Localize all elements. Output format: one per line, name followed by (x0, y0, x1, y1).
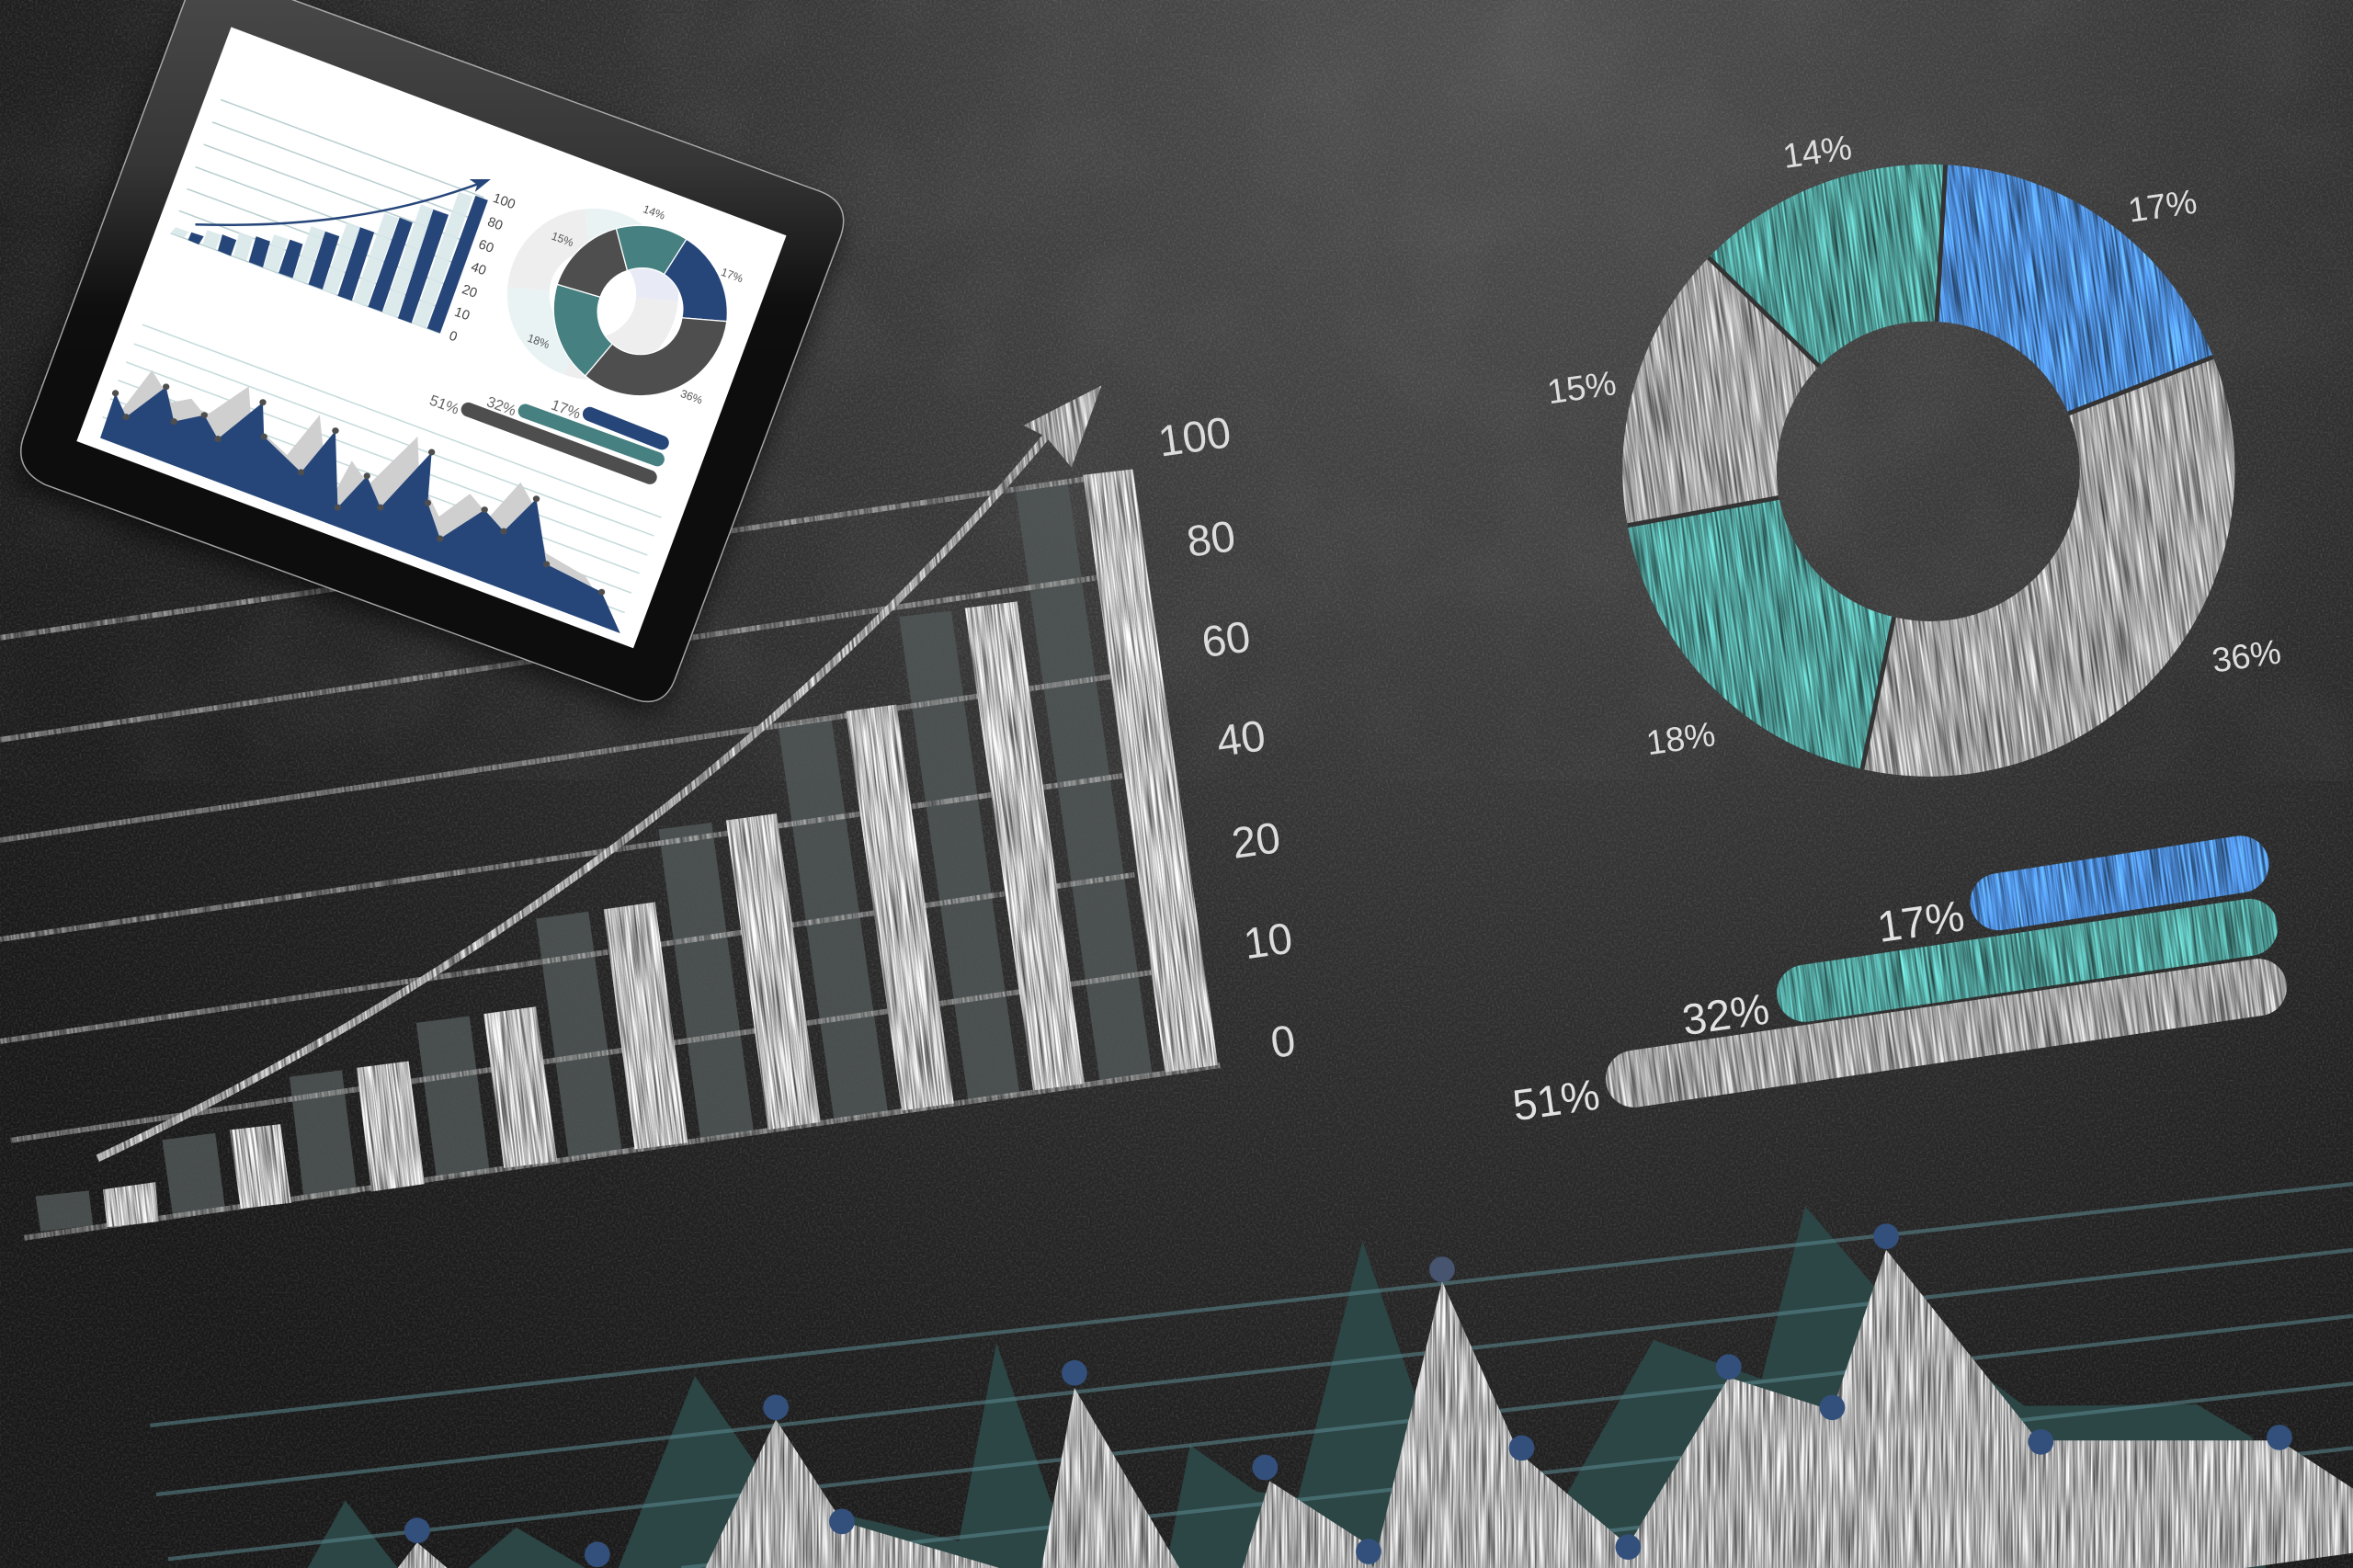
donut labels (1545, 128, 2283, 762)
chalk bars (103, 469, 1218, 1227)
tablet donut labels: 18% (526, 332, 551, 351)
bar chart axis labels (1155, 408, 1299, 1068)
donut labels: 17% (2125, 182, 2200, 230)
tablet with dashboard (17, 0, 844, 710)
tablet axis labels: 20 (460, 282, 479, 301)
donut labels: 36% (2210, 631, 2283, 680)
area gridlines (150, 1184, 2353, 1568)
bar chart axis labels: 20 (1229, 813, 1283, 869)
progress bar 32 percent (1805, 927, 2249, 994)
tablet donut labels: 15% (550, 230, 575, 249)
tablet axis labels: 100 (491, 191, 517, 212)
tablet gray area (100, 370, 620, 632)
tablet charts (100, 99, 661, 633)
tablet bar labels: 51% (427, 392, 461, 418)
tablet axis labels: 0 (447, 329, 459, 345)
progress bar 51 percent (1634, 987, 2258, 1079)
tablet bar labels (427, 392, 583, 423)
tablet axis labels: 10 (452, 305, 472, 324)
tablet bar labels: 32% (484, 393, 518, 419)
progress bar labels: 32% (1679, 985, 1772, 1045)
tablet bar labels: 17% (549, 397, 583, 423)
tablet ghost donut (529, 230, 657, 358)
bar chart axis labels: 80 (1184, 512, 1238, 567)
tablet donut labels: 14% (642, 202, 667, 222)
tablet progress bars (468, 410, 662, 477)
tablet navy area (100, 387, 620, 633)
bar chart axis labels: 10 (1241, 915, 1295, 969)
dark background bars (36, 483, 1153, 1232)
tablet donut labels: 36% (678, 387, 704, 407)
stacked progress bars (1510, 864, 2258, 1131)
tablet donut chart (553, 225, 727, 396)
bar chart axis labels: 40 (1214, 711, 1268, 767)
donut segment gaps (1628, 165, 2213, 769)
trend arrow (97, 386, 1101, 1158)
tablet axis labels: 60 (476, 237, 495, 256)
donut labels: 14% (1780, 128, 1854, 176)
progress bar labels: 51% (1510, 1071, 1603, 1131)
tablet area dots (112, 383, 605, 596)
tablet axis labels: 80 (485, 215, 505, 233)
donut labels: 15% (1545, 363, 1619, 411)
progress bar 17 percent (1999, 864, 2240, 902)
tablet axis labels (447, 191, 517, 345)
teal back area (308, 1207, 2266, 1568)
tablet area gridlines (103, 324, 661, 613)
tablet shadow (17, 12, 840, 710)
donut labels: 18% (1643, 714, 1718, 762)
area data points (404, 1223, 2292, 1567)
tablet donut labels: 17% (720, 266, 745, 285)
tablet trend arrow (196, 179, 491, 225)
bar chart with trend arrow (0, 386, 1299, 1238)
chart gridlines (0, 479, 1220, 1238)
tablet bar gridlines (171, 99, 484, 333)
donut chart (1545, 128, 2283, 777)
tablet light bars (171, 192, 472, 328)
tablet axis labels: 40 (469, 260, 488, 278)
progress bar labels (1510, 892, 1967, 1131)
chalk front area (398, 1250, 2353, 1568)
tablet navy bars (188, 196, 488, 334)
progress bar labels: 17% (1874, 892, 1967, 952)
tablet donut labels (526, 202, 745, 407)
bar chart axis labels: 60 (1199, 612, 1254, 667)
tablet body (21, 0, 844, 701)
donut segments (1622, 165, 2234, 777)
tablet screen (76, 27, 787, 648)
bar chart axis labels: 100 (1155, 408, 1233, 467)
area chart (150, 1184, 2353, 1568)
bar chart axis labels: 0 (1267, 1017, 1299, 1068)
